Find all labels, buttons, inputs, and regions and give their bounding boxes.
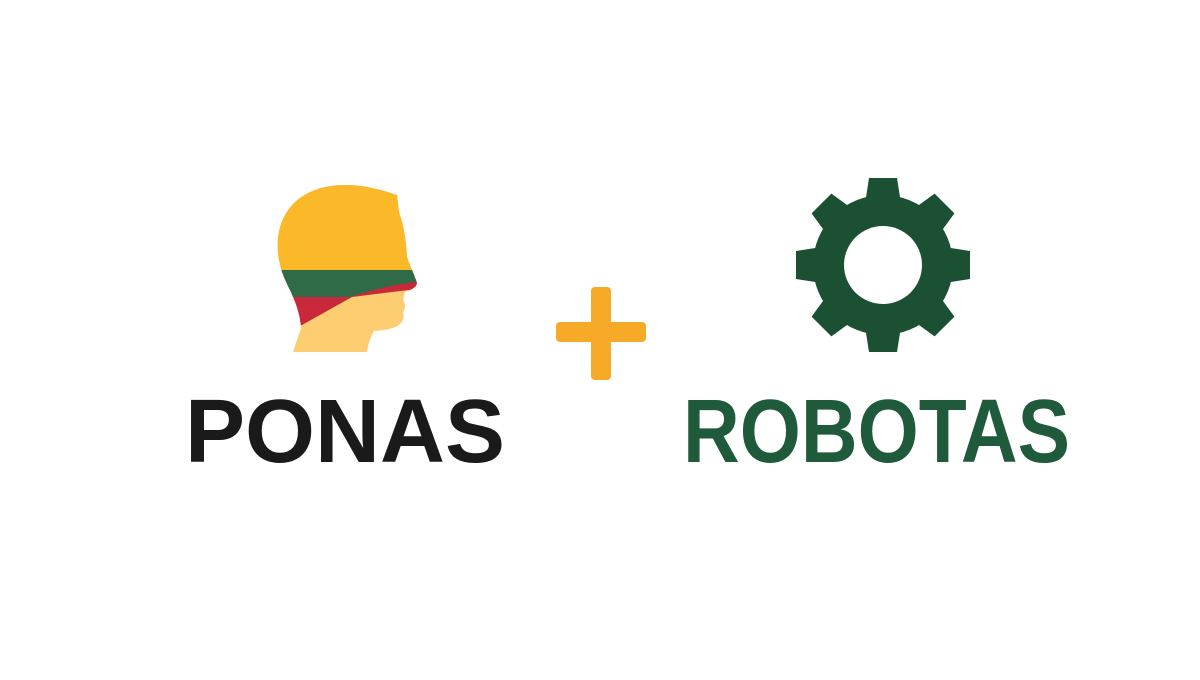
label: PONAS: PONAS: [185, 382, 505, 482]
icon: head: [278, 185, 417, 352]
icon: plus: [556, 287, 646, 380]
icon: gear: [796, 178, 970, 352]
label: ROBOTAS: ROBOTAS: [683, 382, 1070, 482]
